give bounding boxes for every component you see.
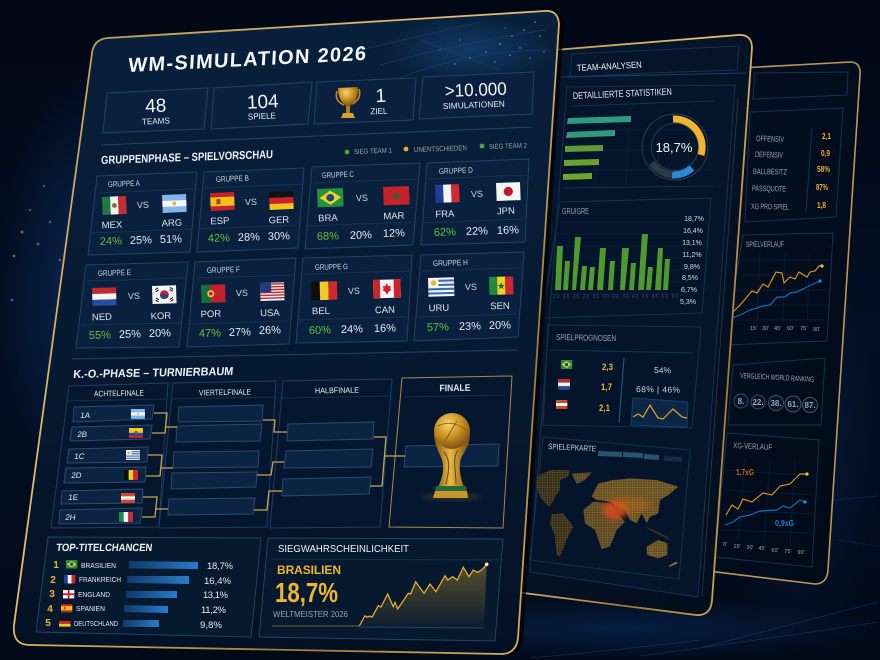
card: Gruppe F	[187, 258, 296, 347]
card: Gruppe G: 16%	[374, 322, 396, 335]
stat: simulations: >10.000	[444, 79, 507, 101]
card: Gruppe B: GER	[268, 215, 290, 226]
stats card: 87%	[816, 182, 828, 192]
flag: Belgium	[124, 470, 138, 480]
flag: Belgium	[311, 281, 337, 300]
flag: Austria	[121, 493, 135, 503]
line chart: Spielverlauf: 90'	[813, 327, 820, 333]
ranking row 3	[49, 589, 229, 601]
card: Gruppe A: GRUPPE A	[108, 179, 141, 189]
flag: USA	[260, 282, 285, 301]
flag: Paraguay	[558, 379, 570, 390]
world ranking comparison: 61.	[787, 400, 799, 409]
flag: Argentina	[131, 409, 145, 419]
card: Gruppe D: JPN	[497, 206, 515, 217]
line chart: xG-Verlauf: 0'	[723, 542, 727, 548]
stats card: OFFENSIV	[756, 134, 785, 144]
ranking row 3: 13,1%	[203, 590, 229, 601]
world ranking comparison	[728, 358, 825, 425]
header bar	[560, 46, 747, 77]
ranking row 5: DEUTSCHLAND	[74, 619, 118, 628]
bracket: Viertelfinale	[159, 381, 276, 528]
bracket: Achtelfinale: 2H	[65, 513, 76, 522]
card: Gruppe C: 12%	[383, 227, 405, 240]
line chart: Spielverlauf: 45'	[774, 326, 781, 332]
ranking row 5: 9,8%	[200, 620, 223, 631]
card: Gruppe D: VS	[471, 189, 483, 199]
match predictions: 54%	[654, 365, 672, 375]
card: Gruppe C: BRA	[318, 213, 339, 224]
bracket: Achtelfinale	[51, 383, 168, 528]
card: Gruppe G: VS	[348, 286, 360, 296]
bar chart: Gruigre: 16,4%	[683, 228, 703, 235]
bar chart: Gruigre: 5,3%	[680, 299, 696, 306]
card: Gruppe C: 68%	[317, 230, 339, 243]
flag: Germany	[269, 191, 294, 210]
card: Gruppe G: GRUPPE G	[315, 262, 348, 272]
stats card: BALLBESITZ	[753, 167, 787, 177]
card: Gruppe F: 27%	[229, 326, 251, 339]
legend: SIEG TEAM 1	[354, 148, 392, 156]
panel: win probability	[259, 538, 503, 641]
flag: Senegal	[489, 276, 513, 295]
card: Gruppe B: GRUPPE B	[216, 174, 249, 184]
stat: 48 teams	[103, 88, 208, 133]
bracket: Achtelfinale: 2D	[71, 471, 82, 480]
card: Gruppe G: 24%	[341, 323, 363, 336]
stats card: 0,9	[821, 148, 830, 158]
bracket: Achtelfinale: 2B	[77, 430, 88, 439]
bar chart: Gruigre: 13,1%	[682, 240, 702, 247]
line chart: xG-Verlauf: 0,9xG	[775, 519, 794, 528]
flag: Portugal	[201, 284, 226, 303]
line chart: Spielverlauf	[725, 233, 833, 345]
panel: top title chances	[36, 537, 261, 637]
card: Gruppe D	[421, 159, 529, 245]
panel: win probability: WELTMEISTER 2026	[273, 610, 349, 619]
ranking row 2	[50, 575, 232, 587]
line chart: xG-Verlauf: 30'	[746, 545, 754, 551]
card: Gruppe C	[305, 163, 420, 249]
stat: 48 teams: 48	[145, 96, 167, 117]
line chart: Spielverlauf: SPIELVERLAUF	[746, 240, 784, 249]
panel: team analyses tablet	[500, 35, 752, 615]
flag: Mexico	[102, 196, 127, 215]
match predictions: SPIELPROGNOSEN	[556, 332, 616, 343]
donut chart	[642, 114, 708, 180]
ranking row 2: 2	[50, 575, 56, 586]
line chart: Spielverlauf: 15'	[750, 326, 757, 332]
line chart: xG-Verlauf: 15'	[733, 544, 741, 550]
flag: Brazil	[561, 360, 572, 369]
card: Gruppe C: VS	[356, 193, 368, 203]
card: Gruppe G	[296, 255, 412, 343]
flag: South Korea	[152, 285, 177, 304]
bracket: Halbfinale	[270, 379, 392, 528]
detailed statistics: DETAILLIERTE STATISTIKEN	[573, 87, 672, 102]
card: Gruppe D: FRA	[435, 209, 455, 220]
bracket: Achtelfinale: ACHTELFINALE	[94, 389, 144, 398]
card: Gruppe A: 51%	[160, 233, 182, 246]
card: Gruppe H: 23%	[459, 320, 481, 333]
card: Gruppe H: URU	[428, 303, 450, 314]
bar chart: Gruigre: 18,7%	[684, 216, 704, 223]
card: Gruppe E: VS	[128, 291, 140, 301]
legend: SIEG TEAM 2	[489, 143, 527, 151]
card: Gruppe B: 30%	[268, 230, 290, 243]
match predictions: 2,1	[599, 403, 611, 414]
world ranking comparison: 87.	[804, 401, 816, 410]
line chart: xG-Verlauf: XG-VERLAUF	[733, 441, 772, 452]
flag: Uruguay	[428, 277, 454, 297]
stats card: DEFENSIV	[755, 150, 784, 160]
card: Gruppe A: ARG	[161, 218, 182, 229]
stats card: 58%	[817, 164, 830, 174]
bar chart: Gruigre: 6,7%	[681, 287, 697, 294]
card: Gruppe F: POR	[200, 309, 222, 320]
card: Gruppe H: 20%	[489, 319, 511, 332]
bar chart: Gruigre: GRUIGRE	[562, 207, 589, 216]
world map	[530, 437, 690, 579]
match predictions: 1,7	[601, 382, 612, 393]
bracket: Achtelfinale: 1E	[68, 493, 79, 502]
ranking row 1: 1	[53, 560, 59, 571]
line chart: Spielverlauf: 60'	[787, 326, 794, 332]
stat: 48 teams: TEAMS	[142, 115, 170, 127]
flag: Brazil	[317, 188, 344, 207]
line chart: Spielverlauf: 30'	[762, 326, 769, 332]
match predictions: 68% | 46%	[636, 384, 681, 395]
flag: Argentina	[162, 194, 187, 213]
card: Gruppe H: VS	[465, 282, 477, 292]
card: Gruppe A: 25%	[130, 234, 152, 247]
line chart: Spielverlauf: 75'	[800, 326, 807, 332]
flag: Ecuador	[129, 428, 143, 438]
card: Gruppe G: BEL	[312, 306, 330, 317]
line chart: xG-Verlauf: 60'	[771, 548, 779, 554]
bracket connectors	[142, 413, 405, 517]
ranking row 4: SPANIEN	[76, 604, 105, 613]
flag: Canada	[373, 279, 401, 298]
panel: win probability: 18,7%	[275, 577, 338, 608]
flag: Uruguay	[126, 450, 140, 460]
flag: Spain	[210, 192, 235, 211]
card: Gruppe C: GRUPPE C	[322, 170, 354, 180]
card: Gruppe D: 16%	[497, 224, 519, 237]
header bar: TEAM-ANALYSEN	[577, 60, 642, 73]
ranking row 3: ENGLAND	[78, 590, 111, 599]
card: Gruppe B	[197, 168, 304, 252]
line chart: xG-Verlauf: 1,7xG	[736, 468, 754, 477]
bracket: Finale: FINALE	[439, 383, 471, 394]
card: Gruppe E: NED	[92, 312, 112, 323]
ranking row 4: 11,2%	[201, 605, 227, 616]
card: Gruppe A: 24%	[100, 235, 122, 248]
card: Gruppe B: 42%	[208, 232, 230, 245]
bracket: Viertelfinale: VIERTELFINALE	[199, 388, 251, 397]
bracket: Achtelfinale: 1C	[74, 452, 85, 461]
flag: Netherlands	[92, 287, 117, 306]
stat: simulations: SIMULATIONEN	[443, 99, 505, 111]
heading: group stage: GRUPPENPHASE – SPIELVORSCHAU	[101, 149, 273, 167]
top bar	[753, 72, 848, 99]
bar: teams	[563, 116, 631, 180]
card: Gruppe A: MEX	[101, 220, 123, 231]
card: Gruppe B: 28%	[238, 231, 260, 244]
legend: UNENTSCHIEDEN	[414, 145, 467, 154]
bar chart: Gruigre: 9,8%	[684, 264, 700, 271]
card: Gruppe F: 47%	[199, 327, 221, 340]
card: Gruppe B: ESP	[210, 216, 230, 227]
stats card: 2,1	[822, 131, 831, 141]
flag: Japan	[496, 182, 521, 201]
card: Gruppe A	[88, 172, 197, 255]
card: Gruppe D: 62%	[434, 226, 456, 239]
ranking row 1: BRASILIEN	[81, 561, 116, 570]
ranking row 4: 4	[47, 604, 53, 615]
card: Gruppe F: GRUPPE F	[207, 265, 240, 275]
world ranking comparison: 38.	[770, 399, 782, 408]
card: Gruppe E: 55%	[89, 329, 111, 342]
stat: simulations	[419, 72, 534, 119]
bracket: Finale	[389, 376, 512, 528]
detailed statistics	[562, 87, 714, 188]
stat: 1 ziel	[314, 78, 416, 124]
icon: gold trophy	[336, 87, 360, 118]
flag: Austria	[556, 400, 567, 409]
ranking row 2: FRANKREICH	[79, 575, 121, 584]
stats card: PASSQUOTE	[752, 184, 786, 194]
flag: France	[435, 184, 460, 203]
panel: back tablet	[700, 62, 860, 584]
line chart: xG-Verlauf	[715, 433, 819, 567]
world ranking comparison: 8.	[738, 397, 744, 406]
card: Gruppe D: 22%	[466, 225, 488, 238]
card: Gruppe E: GRUPPE E	[98, 268, 131, 278]
card: Gruppe F: 26%	[259, 324, 281, 337]
world map: SPIELEPKARTE	[548, 442, 596, 454]
world ranking comparison: VERGLEICH WORLD RANKING	[740, 371, 814, 384]
card: Gruppe E: 20%	[149, 327, 171, 340]
card: Gruppe C: MAR	[383, 211, 405, 222]
bar chart: Gruigre: 20 20 20 25 30 00 06 30 45 60 65 65 90	[553, 294, 678, 300]
inner sheet	[530, 85, 735, 597]
card: Gruppe E: 25%	[119, 328, 141, 341]
title: WM-SIMULATION 2026	[128, 43, 367, 77]
ranking row 5: 5	[45, 618, 51, 629]
bracket: Halbfinale: HALBFINALE	[315, 386, 359, 395]
world ranking comparison: 22.	[752, 398, 764, 407]
card: Gruppe B: VS	[245, 197, 257, 207]
card: Gruppe F: USA	[260, 308, 281, 319]
bar chart: Gruigre: 8,5%	[682, 275, 698, 282]
card: Gruppe H: SEN	[490, 301, 510, 312]
card: Gruppe H: 57%	[427, 321, 449, 334]
stat: 1 ziel: ZIEL	[370, 106, 388, 116]
ranking row 5	[45, 618, 223, 631]
donut chart: 18,7%	[656, 140, 693, 155]
line chart: xG-Verlauf: 75'	[784, 549, 792, 555]
match predictions: 2,3	[602, 362, 613, 373]
stats card	[745, 108, 843, 222]
card: Gruppe G: CAN	[375, 305, 395, 316]
line chart: xG-Verlauf: 90'	[797, 550, 805, 556]
match predictions	[543, 325, 701, 428]
ranking row 3: 3	[49, 589, 55, 600]
card: Gruppe F: VS	[236, 288, 248, 298]
bar chart: Gruigre	[542, 198, 711, 318]
ranking row 1	[53, 560, 234, 572]
panel: main tablet	[14, 11, 559, 654]
stat: 104 spiele	[211, 82, 312, 129]
card: Gruppe H	[414, 252, 524, 341]
panel: win probability: BRASILIEN	[277, 563, 341, 577]
bracket: Achtelfinale: 1A	[80, 411, 91, 420]
legend	[345, 143, 527, 156]
stats card: 1,8	[817, 200, 826, 210]
stats card: XG PRO SPIEL	[751, 202, 789, 212]
line chart: xG-Verlauf: 45'	[758, 546, 766, 552]
panel: win probability: SIEGWAHRSCHEINLICHKEIT	[278, 544, 409, 555]
card: Gruppe A: VS	[137, 200, 149, 210]
stat: 104 spiele: SPIELE	[248, 110, 276, 122]
ranking row 2: 16,4%	[204, 576, 232, 587]
stat: 1 ziel: 1	[375, 86, 386, 107]
heading: knockout stage: K.-O.-PHASE – TURNIERBAUM	[73, 366, 234, 381]
panel: main tablet shadow	[19, 12, 564, 655]
icon: world cup trophy	[433, 413, 470, 498]
card: Gruppe G: 60%	[309, 324, 331, 337]
card: Gruppe D: GRUPPE D	[439, 166, 473, 176]
ranking row 1: 18,7%	[207, 561, 234, 572]
flag: Italy	[119, 512, 133, 522]
stat: 104 spiele: 104	[246, 91, 279, 114]
area chart	[359, 562, 489, 628]
panel: top title chances: TOP-TITELCHANCEN	[56, 542, 153, 554]
mini chart	[631, 398, 688, 427]
card: Gruppe C: 20%	[350, 229, 372, 242]
card: Gruppe H: GRUPPE H	[433, 258, 468, 268]
card: Gruppe E	[76, 262, 188, 348]
ranking row 4	[47, 604, 227, 616]
flag: Morocco	[383, 186, 410, 205]
card: Gruppe E: KOR	[150, 311, 172, 322]
bar chart: Gruigre: 11,2%	[682, 252, 702, 259]
